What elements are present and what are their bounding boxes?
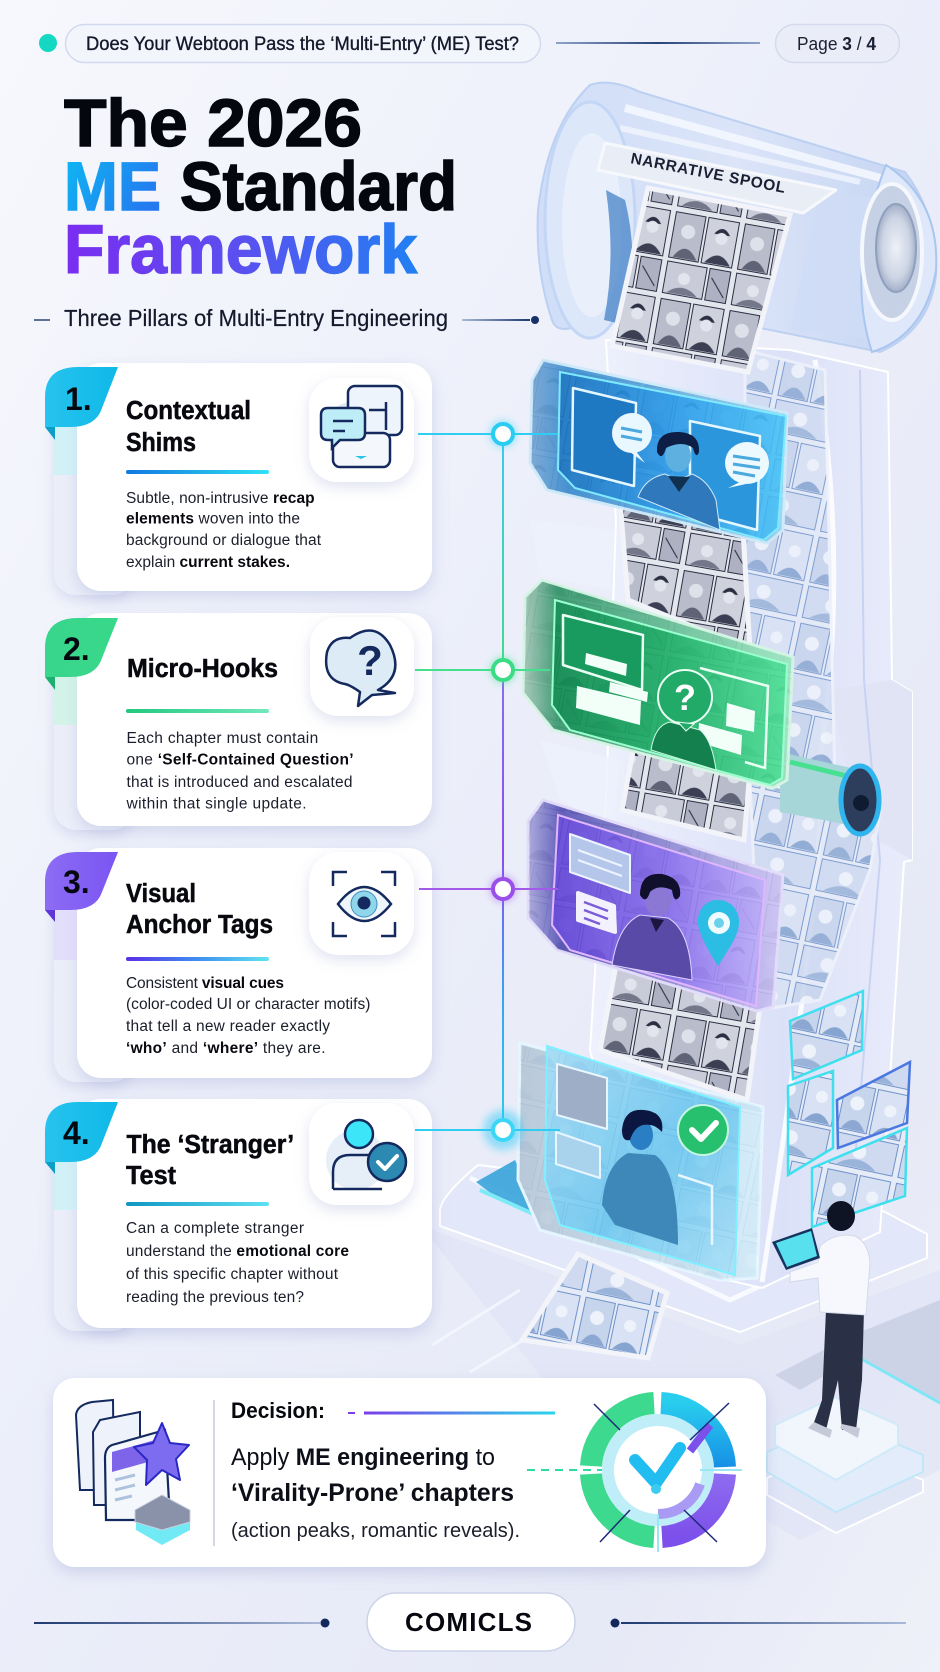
description: within that single update. [126, 796, 306, 812]
chat chips [576, 653, 755, 755]
decision text: Apply ME engineering to [231, 1444, 495, 1471]
description: one ‘Self-Contained Question’ [126, 752, 354, 768]
title: The 2026 [64, 86, 362, 161]
brand pill [367, 1593, 575, 1651]
dashed link [527, 1469, 612, 1471]
description: of this specific chapter without [126, 1266, 339, 1283]
machine base [440, 1160, 927, 1332]
chat bubble left [612, 413, 652, 463]
icon: question bubble: ? [357, 637, 383, 684]
icon: verified person [309, 1103, 414, 1205]
chat box [570, 834, 630, 893]
decision label: Decision: [231, 1398, 325, 1423]
number tab: 2. [63, 631, 90, 667]
decision text [231, 1444, 520, 1542]
connector spine [502, 434, 504, 1130]
chat bubble right [725, 442, 769, 488]
description [126, 490, 322, 571]
heading: Shims [126, 429, 196, 457]
page pill: Page 3 / 4 [797, 34, 876, 54]
heading [126, 880, 273, 939]
headline pill [66, 24, 540, 62]
heading: Anchor Tags [126, 911, 273, 939]
chart: segmented target donut [591, 1403, 742, 1552]
panel: decision [53, 1378, 766, 1567]
glass card: blue (contextual shims) [530, 355, 790, 545]
subtitle: Three Pillars of Multi-Entry Engineering [64, 305, 448, 331]
description: understand the emotional core [126, 1243, 349, 1260]
connector 1 with node [418, 421, 558, 447]
heading: Test [126, 1162, 176, 1190]
description: that is introduced and escalated [126, 774, 352, 791]
location pin [698, 900, 739, 966]
spool label: NARRATIVE SPOOL: NARRATIVE SPOOL [629, 150, 787, 197]
comic strip: top segment [612, 188, 790, 372]
description: elements woven into the [126, 510, 300, 528]
description: reading the previous ten? [126, 1289, 304, 1306]
description: Subtle, non-intrusive recap [126, 490, 315, 507]
number tab [45, 367, 118, 440]
status dot [39, 34, 57, 52]
side roller [780, 752, 879, 834]
description: (color-coded UI or character motifs) [126, 996, 370, 1013]
panel: pillar 3 visual anchor tags [45, 848, 432, 1082]
panel: pillar 2 micro-hooks [45, 613, 432, 830]
heading: Visual [126, 880, 196, 908]
number tab [45, 1102, 118, 1174]
glass card: cyan (stranger test) [515, 1040, 765, 1285]
description [126, 975, 370, 1057]
description: ‘who’ and ‘where’ they are. [126, 1040, 326, 1057]
title: Standard [180, 148, 457, 225]
character [638, 432, 720, 530]
spool label band [598, 143, 836, 213]
chat bubble [578, 893, 615, 932]
title [64, 86, 457, 288]
title: ME [64, 148, 161, 225]
header [39, 24, 900, 62]
description [126, 730, 354, 812]
description: Consistent visual cues [126, 975, 284, 992]
heading: Micro-Hooks [127, 655, 278, 683]
title: Framework [64, 211, 418, 288]
description: that tell a new reader exactly [126, 1018, 330, 1035]
icon: question bubble [310, 617, 414, 716]
question bubble: ? [674, 677, 696, 718]
icon: eye in focus brackets [309, 852, 414, 955]
character [602, 1110, 678, 1245]
heading [126, 1131, 294, 1190]
number tab [45, 852, 118, 922]
glass card: purple (visual anchor tags) [520, 795, 790, 1015]
check badge [678, 1105, 728, 1155]
glass pillar [530, 340, 912, 1288]
description: Can a complete stranger [126, 1220, 304, 1237]
secondary comic strip [745, 350, 880, 1010]
description: background or dialogue that [126, 532, 322, 549]
description [126, 1220, 349, 1306]
decision text: (action peaks, romantic reveals). [231, 1519, 520, 1542]
glass card: green (micro-hooks) [520, 575, 800, 795]
icon: chat overlays [309, 378, 414, 482]
decision text: ‘Virality-Prone’ chapters [231, 1479, 514, 1507]
icon: document stack with star [76, 1400, 190, 1545]
connector 4 with node [415, 1110, 560, 1150]
description: explain current stakes. [126, 554, 290, 571]
connector 3 with node [419, 876, 558, 902]
heading: Contextual [126, 397, 251, 425]
panel: pillar 1 contextual shims [45, 363, 432, 595]
headline pill: Does Your Webtoon Pass the ‘Multi-Entry’ (ME) Test? [86, 34, 519, 55]
description: Each chapter must contain [126, 730, 318, 747]
floor plate [420, 1225, 940, 1540]
comic strip: exit below base [522, 1254, 667, 1358]
number tab [45, 618, 118, 690]
number tab: 4. [63, 1115, 90, 1151]
person's stepped pedestal [767, 1397, 923, 1533]
brand pill: COMICLS [405, 1607, 532, 1637]
comic strip: mid segments [600, 500, 760, 1100]
character [612, 874, 692, 980]
footer [34, 1593, 906, 1651]
question bubble [658, 670, 712, 731]
floating comic tiles [788, 991, 910, 1227]
panel: pillar 4 the stranger test [45, 1099, 432, 1331]
heading [126, 397, 251, 457]
character [651, 722, 716, 770]
number tab: 3. [63, 864, 90, 900]
reader figure with tablet [772, 1201, 870, 1438]
connector 2 with node [415, 657, 550, 683]
heading: The ‘Stranger’ [126, 1131, 294, 1159]
illustration: narrative spool machine [420, 83, 940, 1540]
page pill [776, 24, 900, 62]
spool drum [538, 83, 936, 352]
number tab: 1. [65, 381, 92, 417]
